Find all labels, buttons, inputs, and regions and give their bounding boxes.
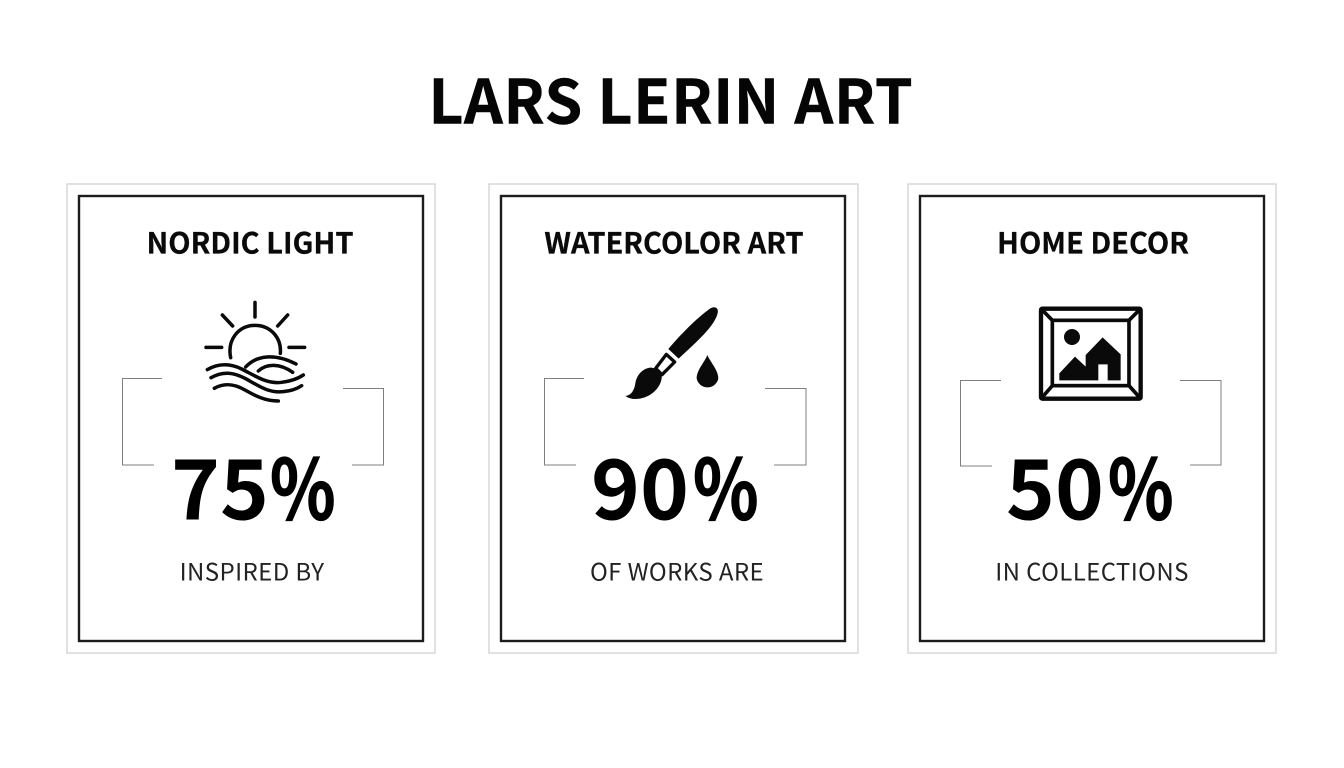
bracket: right <box>765 388 806 465</box>
bracket: right <box>343 388 384 465</box>
stat: 90%: 90 <box>591 424 689 544</box>
icon: framed picture <box>1041 309 1141 399</box>
stat: 75% <box>171 423 336 544</box>
icon: sun over waves <box>206 302 305 401</box>
stat: 75%: % <box>270 423 336 544</box>
heading: nordic light: NORDIC LIGHT <box>147 220 353 262</box>
heading: watercolor art: WATERCOLOR ART <box>544 220 804 262</box>
stat: 90%: % <box>693 423 759 544</box>
panel: home decor <box>908 184 1276 653</box>
stat: 75%: 75 <box>171 424 269 544</box>
stat: 50%: % <box>1108 423 1174 544</box>
heading: home decor: HOME DECOR <box>997 220 1189 262</box>
stat: 50%: 50 <box>1006 424 1104 544</box>
panel: nordic light <box>67 184 435 653</box>
label: of works are: OF WORKS ARE <box>590 552 764 588</box>
stat: 90% <box>591 423 759 544</box>
panel: watercolor art <box>489 184 858 653</box>
bracket: left <box>122 378 162 465</box>
bracket: left <box>544 378 584 465</box>
icon: paintbrush and drop <box>625 307 718 399</box>
title: LARS LERIN ART <box>429 54 913 142</box>
bracket: right <box>1180 380 1221 465</box>
label: inspired by: INSPIRED BY <box>180 552 324 588</box>
bracket: left <box>960 380 1001 466</box>
stat: 50% <box>1006 423 1174 544</box>
label: in collections: IN COLLECTIONS <box>995 552 1189 588</box>
